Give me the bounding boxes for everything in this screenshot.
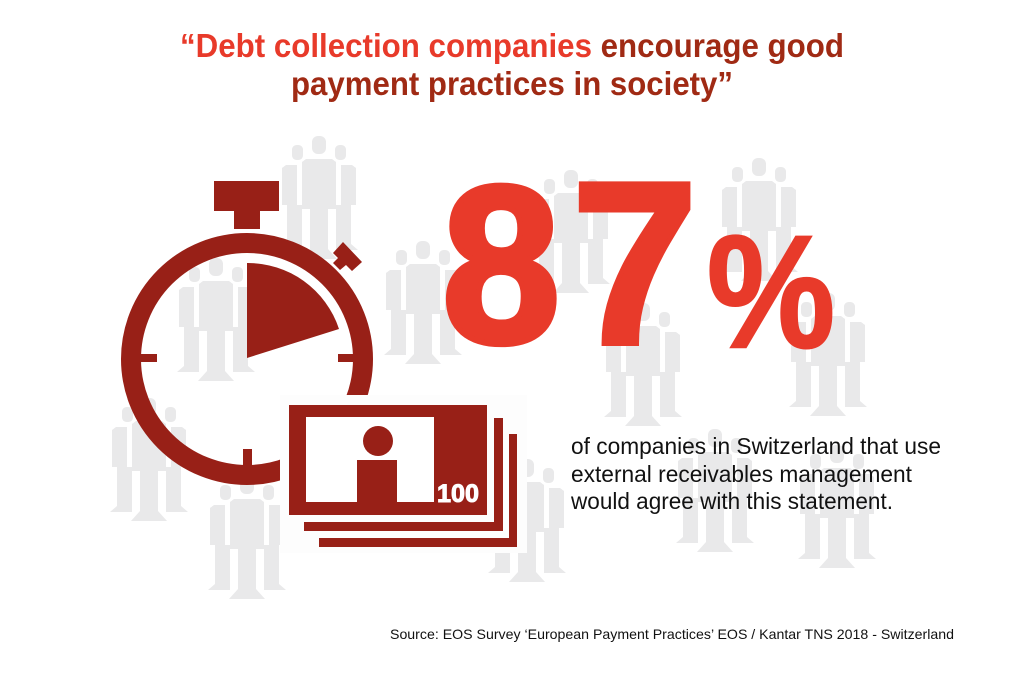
statement text: external receivables management xyxy=(571,461,913,487)
icon: stack of banknotes: 100 xyxy=(437,480,479,508)
big statistic: 87 percent: % xyxy=(707,203,835,382)
statement text xyxy=(570,433,941,514)
title xyxy=(180,27,844,102)
statement text: of companies in Switzerland that use xyxy=(571,433,941,459)
title: payment practices in society” xyxy=(291,65,733,102)
background: crowd of people silhouettes xyxy=(110,136,876,599)
big statistic: 87 percent: 8 xyxy=(442,140,560,390)
big statistic: 87 percent: 7 xyxy=(572,133,698,393)
source note: Source: EOS Survey ‘European Payment Practices’ EOS / Kantar TNS 2018 - Switzerland xyxy=(390,626,954,642)
title: “Debt collection companies encourage good xyxy=(180,27,844,64)
big statistic: 87 percent xyxy=(442,133,835,393)
icon: stack of banknotes xyxy=(280,395,527,553)
statement text: would agree with this statement. xyxy=(570,488,893,514)
icon: stopwatch xyxy=(131,181,363,475)
